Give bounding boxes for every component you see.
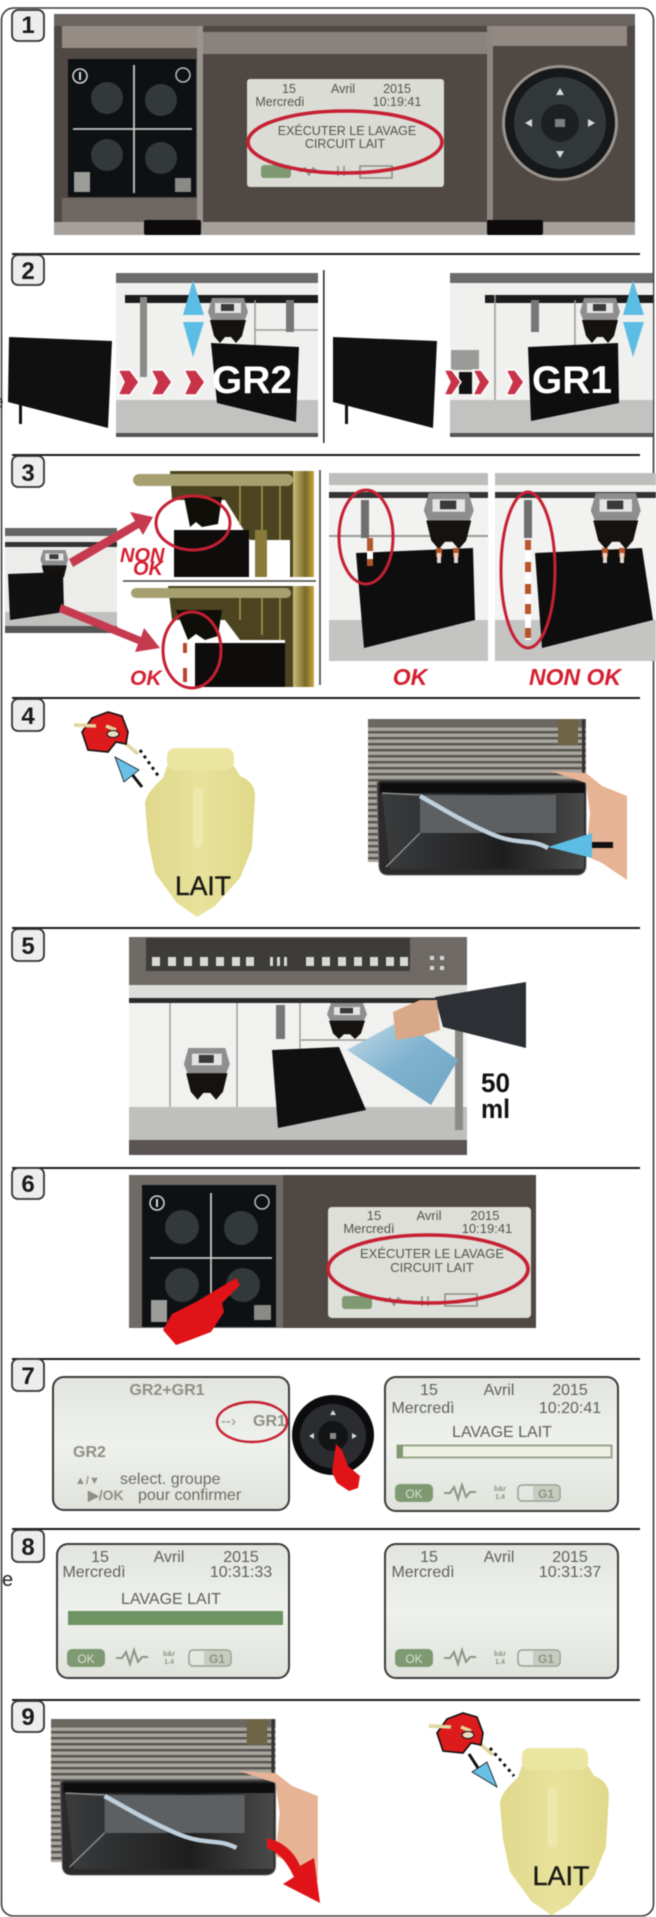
blue arrow bbox=[115, 757, 142, 787]
idle screen: b&r bbox=[494, 1651, 506, 1658]
step badge 3: 3 bbox=[21, 460, 35, 487]
blue double arrow GR1 bbox=[623, 280, 644, 357]
divider 8 bbox=[12, 1528, 640, 1530]
labels NON OK / OK bbox=[120, 545, 165, 690]
panel 1: control panel bbox=[54, 14, 635, 235]
milk bottle bbox=[145, 748, 255, 917]
control photo bbox=[129, 1175, 536, 1328]
wash progress screen start: OK bbox=[405, 1487, 423, 1501]
labels under photos bbox=[393, 664, 622, 690]
display screen: EXÉCUTER LE LAVAGE bbox=[360, 1246, 504, 1261]
step badge 9 bbox=[12, 1701, 44, 1732]
step badge 7 bbox=[12, 1359, 44, 1391]
panel 6: press wash button bbox=[129, 1175, 536, 1345]
idle screen: 15 bbox=[420, 1549, 438, 1566]
red curved arrow bbox=[267, 1838, 320, 1903]
red hand with cap bbox=[429, 1713, 493, 1755]
idle screen: 2015 bbox=[552, 1549, 588, 1566]
quantity label bbox=[481, 1068, 510, 1124]
milk bottle: LAIT bbox=[175, 871, 231, 901]
blue arrow bbox=[469, 1754, 497, 1787]
container left 1 bbox=[8, 337, 112, 428]
group selection screen: GR1 bbox=[253, 1413, 286, 1430]
small machine view bbox=[5, 528, 117, 633]
quantity label: ml bbox=[481, 1094, 510, 1124]
step badge 8 bbox=[12, 1530, 44, 1562]
step badge 5 bbox=[12, 929, 44, 961]
vertical separator bbox=[323, 270, 325, 443]
red highlight ellipse bbox=[248, 111, 442, 173]
divider 4 bbox=[12, 697, 640, 699]
divider 9 bbox=[12, 1699, 640, 1701]
wash progress screen start: b&r bbox=[494, 1486, 506, 1493]
photo NON OK bbox=[495, 473, 656, 661]
wash progress screen start: LAVAGE LAIT bbox=[452, 1424, 552, 1441]
divider 5 bbox=[12, 927, 640, 929]
wash progress screen start: Mercredì bbox=[391, 1400, 455, 1417]
wash progress screen start: G1 bbox=[538, 1487, 554, 1501]
display screen: CIRCUIT LAIT bbox=[390, 1260, 474, 1275]
wash progress screen start: Avril bbox=[484, 1382, 514, 1399]
red highlight ellipse bbox=[328, 1235, 528, 1303]
display screen bbox=[328, 1207, 531, 1318]
idle screen: G1 bbox=[538, 1652, 554, 1666]
wash progress screen full: G1 bbox=[209, 1652, 225, 1666]
blue arrow to tray bbox=[548, 833, 613, 858]
panel 7: select group and wash start bbox=[53, 1377, 618, 1511]
idle screen: 1.4 bbox=[495, 1659, 505, 1666]
step badge 4: 4 bbox=[21, 703, 35, 730]
wash progress screen start: 1.4 bbox=[495, 1494, 505, 1501]
gold close-up NON OK bbox=[133, 471, 314, 577]
display screen: 10:19:41 bbox=[462, 1221, 512, 1236]
idle screen bbox=[385, 1544, 618, 1678]
touch panel bbox=[129, 1175, 283, 1328]
step badge 4 bbox=[12, 699, 44, 731]
panel 9: remove tube, reconnect bottle bbox=[51, 1713, 609, 1915]
red oval on GR1 bbox=[217, 1402, 287, 1442]
step badge 6 bbox=[12, 1168, 44, 1199]
labels NON OK / OK: NON bbox=[120, 545, 165, 567]
red arrows bbox=[59, 512, 160, 652]
divider 3 bbox=[12, 454, 640, 456]
step badge 5: 5 bbox=[21, 933, 35, 960]
display screen bbox=[247, 79, 444, 187]
red pointing hand bbox=[163, 1278, 240, 1345]
navigation dial bbox=[502, 65, 618, 181]
detergent bag bbox=[347, 1020, 458, 1105]
quantity label: 50 bbox=[481, 1068, 510, 1098]
group selection screen: ▶/OK bbox=[87, 1487, 124, 1503]
dotted line bbox=[140, 750, 159, 777]
group selection screen bbox=[53, 1377, 289, 1510]
divider 2 bbox=[12, 253, 640, 255]
wash progress screen full: OK bbox=[77, 1652, 95, 1666]
labels under photos: NON OK bbox=[529, 664, 622, 690]
divider 6 bbox=[12, 1167, 640, 1169]
gold close-up OK bbox=[126, 586, 314, 687]
wash progress screen full: 1.4 bbox=[164, 1659, 174, 1666]
idle screen: Mercredì bbox=[391, 1564, 455, 1581]
wash progress screen start bbox=[385, 1377, 618, 1511]
container GR1 with label bbox=[528, 343, 619, 421]
group selection screen: select. groupe bbox=[120, 1471, 221, 1488]
group selection screen: pour confirmer bbox=[138, 1487, 242, 1504]
wash progress screen start: 10:20:41 bbox=[539, 1400, 601, 1417]
display screen: CIRCUIT LAIT bbox=[305, 137, 386, 151]
red chevrons GR2 bbox=[118, 370, 205, 395]
blue double arrow GR2 bbox=[183, 280, 204, 357]
display screen: 15 bbox=[367, 1208, 381, 1223]
panel 5: pouring detergent bbox=[129, 937, 526, 1155]
panel 2: position container bbox=[8, 270, 653, 443]
panel 3: container height checks bbox=[5, 470, 656, 690]
control panel photo bbox=[54, 14, 635, 235]
tray photo with hand bbox=[51, 1719, 318, 1880]
machine photo GR1 bbox=[450, 273, 653, 437]
touch buttons panel bbox=[68, 59, 196, 197]
step badge 7: 7 bbox=[21, 1363, 35, 1390]
stray letter: e bbox=[2, 1569, 13, 1591]
wash progress screen full bbox=[57, 1544, 289, 1678]
display screen: Mercredì bbox=[343, 1221, 395, 1236]
display screen: 10:19:41 bbox=[373, 95, 421, 109]
machine photo GR2 bbox=[116, 273, 318, 437]
step badge 3 bbox=[12, 456, 44, 487]
arm and hand bbox=[393, 982, 526, 1048]
step badge 8: 8 bbox=[21, 1534, 35, 1561]
milk bottle bbox=[500, 1748, 609, 1915]
labels under photos: OK bbox=[393, 664, 429, 690]
wash progress screen full: LAVAGE LAIT bbox=[121, 1591, 221, 1608]
labels NON OK / OK: OK bbox=[133, 558, 165, 580]
wash progress screen full: 2015 bbox=[223, 1549, 259, 1566]
divider 7 bbox=[12, 1358, 640, 1360]
machine photo bbox=[129, 937, 467, 1155]
red ovals on gold views bbox=[156, 496, 230, 688]
container left 2 bbox=[333, 337, 437, 428]
display screen: Avril bbox=[416, 1208, 442, 1223]
wash progress screen full: 10:31:33 bbox=[210, 1564, 272, 1581]
step badge 1 bbox=[12, 10, 44, 41]
step badge 6: 6 bbox=[21, 1171, 35, 1198]
wash progress screen full: b&r bbox=[163, 1651, 175, 1658]
display screen: 2015 bbox=[471, 1208, 499, 1223]
wash progress screen start: 15 bbox=[420, 1382, 438, 1399]
display screen: Mercredì bbox=[255, 95, 305, 109]
panel 8: wash finished bbox=[2, 1544, 618, 1678]
dotted line bbox=[490, 1748, 514, 1776]
display screen: Avril bbox=[331, 82, 355, 96]
photo OK bbox=[329, 473, 488, 661]
wash progress screen full: Avril bbox=[154, 1549, 184, 1566]
wash progress screen full: 15 bbox=[91, 1549, 109, 1566]
wash progress screen start: 2015 bbox=[552, 1382, 588, 1399]
container GR1 with label: GR1 bbox=[532, 359, 612, 402]
display screen: 15 bbox=[282, 82, 296, 96]
step badge 2 bbox=[12, 255, 44, 285]
display screen: 2015 bbox=[383, 82, 411, 96]
red hand with cap bbox=[74, 712, 138, 754]
group selection screen: ▲/▼ bbox=[75, 1475, 100, 1487]
wash progress screen full: Mercredì bbox=[62, 1564, 126, 1581]
black container bbox=[272, 1047, 366, 1128]
idle screen: OK bbox=[405, 1652, 423, 1666]
container GR2 with label bbox=[211, 343, 299, 422]
tray photo with hand bbox=[368, 719, 627, 880]
idle screen: Avril bbox=[484, 1549, 514, 1566]
panel 4: milk bottle and tray bbox=[74, 712, 627, 917]
group selection screen: GR2+GR1 bbox=[129, 1382, 205, 1399]
step badge 9: 9 bbox=[21, 1704, 35, 1731]
red ovals on photos bbox=[339, 490, 555, 648]
labels NON OK / OK: OK bbox=[130, 667, 163, 690]
group selection screen: GR2 bbox=[73, 1444, 106, 1461]
separators bbox=[123, 470, 320, 685]
idle screen: 10:31:37 bbox=[539, 1564, 601, 1581]
group selection screen: --› bbox=[221, 1413, 236, 1430]
step badge 2: 2 bbox=[21, 258, 35, 285]
navigation dial bbox=[292, 1395, 374, 1475]
red chevrons GR1 bbox=[444, 370, 524, 395]
container GR2 with label: GR2 bbox=[212, 359, 292, 402]
milk bottle: LAIT bbox=[532, 1861, 590, 1891]
step badge 1: 1 bbox=[21, 12, 35, 39]
red hand on dial bbox=[332, 1444, 360, 1491]
display screen: EXÉCUTER LE LAVAGE bbox=[278, 123, 416, 138]
